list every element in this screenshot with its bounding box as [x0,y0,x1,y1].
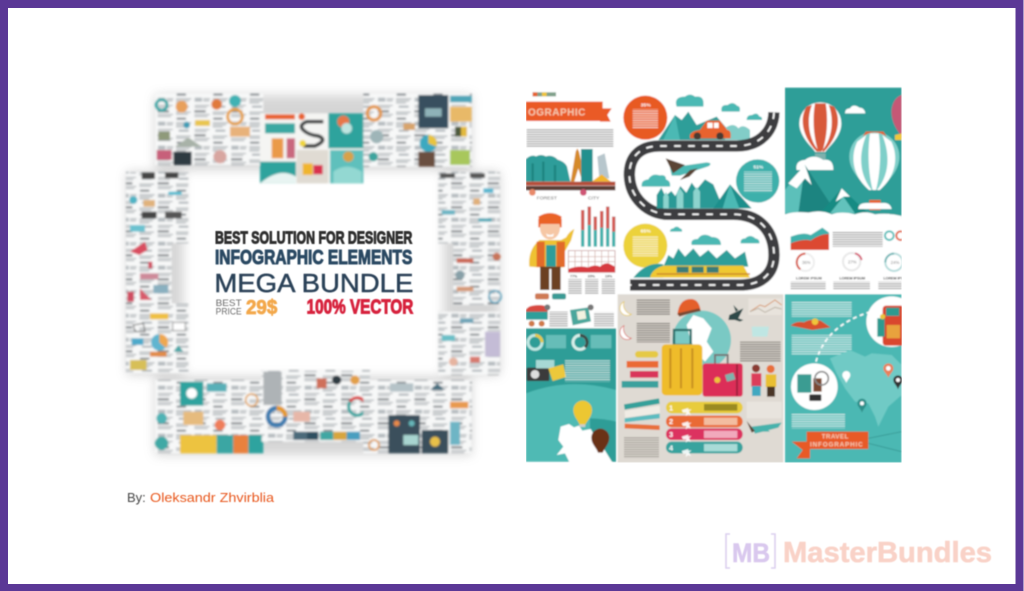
train [650,266,750,278]
image: mega bundle cover [126,93,501,455]
teal bubble [736,159,779,203]
price: 29$: 29$ [246,296,278,319]
winding road [629,112,774,285]
balloon: striped teal [849,132,899,210]
banner text: TRAVEL [822,433,848,440]
panel: top left, ribbon and character [526,87,617,328]
ribbon text: OGRAPHIC [528,108,585,119]
thumbnail: center teal travel [260,113,363,183]
chart text [833,232,883,247]
gauge values: 27% [848,259,857,264]
thumbnail: right column bottom [438,312,500,375]
label: 100% vector: 100% VECTOR [307,297,414,319]
cloud band [784,210,902,220]
mini landscape [791,320,831,330]
yellow suitcase [662,330,702,395]
panel: bottom center beige [618,294,783,463]
area chart [791,228,829,250]
author credit: By: [127,490,146,505]
thumbnail: bottom row right [363,380,472,453]
panel: center road map: 35% [641,102,651,108]
mountains and car [658,112,750,140]
gauge values: 36% [802,260,811,265]
thumbnail: bottom row center [262,370,370,442]
camera and photos [527,360,566,381]
bar chart [581,207,615,247]
cloud mid [642,175,670,187]
map pins [529,189,536,196]
curved lighter area [526,384,616,462]
flight path [816,312,871,362]
heading: best solution: BEST SOLUTION FOR DESIGNER [215,227,413,247]
thumbnail: right column middle [453,242,501,305]
bag icons row [526,304,614,327]
panel: top left, ribbon and character: 19% [605,275,613,279]
balloon: teal right top [892,95,902,138]
line chart [748,298,782,315]
couple of travelers [751,364,776,397]
label: best price: PRICE [216,306,242,316]
panel: top left, ribbon and character: 77% [570,275,578,279]
panel: bottom right map [785,294,917,463]
tickets [624,398,660,430]
gauge values [802,259,899,265]
yellow bubble [623,224,667,268]
thumbnail: left column top [126,172,188,243]
watermark: MasterBundles [726,534,992,569]
panel: center road map [618,85,783,293]
pink suitcase [703,355,743,397]
gauge captions [791,276,909,290]
gauge captions: LOREM IPSUM [796,276,822,280]
airplane top right [728,305,743,322]
balloon: striped orange [799,102,841,162]
label: best price: BEST [216,298,242,308]
forest and mountain [657,179,723,208]
thumbnail: left column bottom [126,303,188,373]
legend bars [622,351,658,388]
numbered flight bars: 1 [669,403,673,412]
hat [677,299,701,317]
numbered flight bars: 3 [669,430,673,439]
numbered flight bars: 4 [669,443,674,452]
mountains [785,165,868,213]
thumbnail: top left [155,93,263,165]
banner [792,432,902,458]
gauge captions: LOREM IPSUM [883,276,909,280]
globe [672,311,731,369]
airplane [666,158,710,180]
panel: top left, ribbon and character: 35% [588,275,596,279]
europe map [557,424,612,463]
pin labels: FOREST [537,195,557,201]
gauge values: 24% [891,260,899,265]
text block [740,342,781,362]
heading: mega bundle: MEGA BUNDLE [214,268,413,298]
thumbnail: bottom row left [155,380,263,453]
intro text lines [527,128,613,148]
envelope [752,327,769,337]
panel: top right balloons [785,88,902,224]
donut gauges [797,253,903,271]
backpack circle [866,296,917,347]
skyline [526,148,615,190]
headline stack [214,227,414,319]
clouds behind balloon [796,157,833,170]
thumbnail: top right [363,93,472,167]
pins [885,231,894,240]
numbered flight bars: 2 [669,417,673,426]
forest lower [663,248,748,267]
panel: bottom left teal [526,328,616,463]
thumbnail: left column middle [126,242,172,303]
heading: infographic elements: INFOGRAPHIC ELEMENTS [215,247,412,269]
clouds lower [670,227,759,245]
panel: center road map: 65% [641,228,651,234]
numbered flight bars [666,402,743,457]
thumbnail: right column top [438,172,500,243]
label: best price [216,298,242,316]
author credit: Oleksandr Zhvirblia [150,490,275,505]
thumbnails group [126,93,501,453]
yellow balloon [573,401,592,426]
area chart [568,251,615,272]
banner: INFOGRAPHIC [810,441,863,448]
brown balloon [591,429,609,453]
clouds top [676,95,762,120]
airplane lower [752,423,782,434]
map pins [842,363,903,413]
panel: stats area below balloons [785,222,909,293]
wordmark: MasterBundles [783,537,992,569]
world map [830,350,902,427]
orange bubble [623,96,667,140]
frame shadow [127,95,500,455]
travel objects circle [791,363,838,410]
text blocks [792,302,852,317]
character [529,213,574,299]
logo mark: MB [732,538,770,568]
gauge captions: LOREM IPSUM [839,276,865,280]
panel: center road map: 51% [753,164,764,170]
ribbon [526,102,612,122]
chart captions [568,279,582,294]
image: travel infographic [526,85,917,463]
small cloud [845,106,865,113]
panel: top left, ribbon and character: CITY [588,195,600,201]
